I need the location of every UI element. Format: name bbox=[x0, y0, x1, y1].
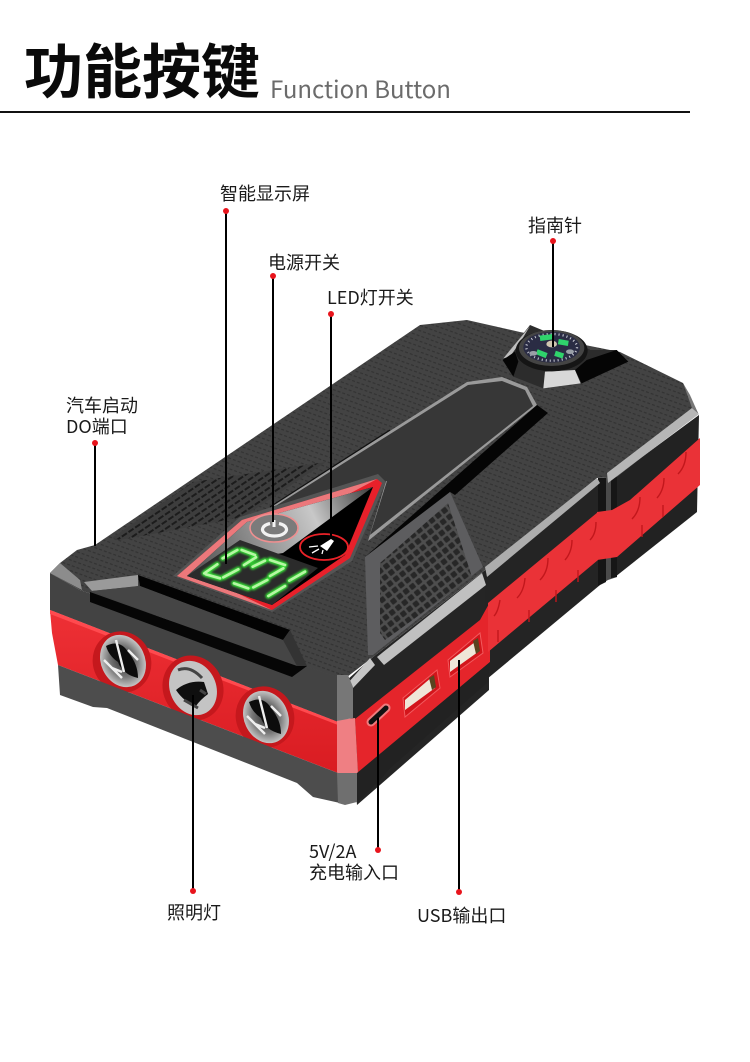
top left texture patch bbox=[112, 462, 326, 540]
callout: USB输出口 bbox=[417, 660, 506, 928]
callout: LED灯开关 bbox=[327, 284, 414, 538]
right texture patch bbox=[365, 492, 483, 655]
title: Function Button bbox=[270, 70, 451, 105]
front chamfer bbox=[50, 573, 338, 722]
callout: 5V/2A 充电输入口: 5V/2A bbox=[309, 838, 356, 864]
callout: 汽车启动 DO端口: 汽车启动 bbox=[66, 392, 138, 418]
lamp 1 bbox=[83, 622, 161, 702]
callout: 5V/2A 充电输入口: 充电输入口 bbox=[309, 859, 399, 885]
light edge highlights bbox=[348, 383, 699, 688]
display panel bbox=[173, 474, 386, 612]
red side band bbox=[355, 438, 700, 773]
callout: 指南针 bbox=[528, 212, 582, 347]
callout: 智能显示屏: 智能显示屏 bbox=[220, 180, 310, 206]
callout: 照明灯: 照明灯 bbox=[167, 899, 221, 925]
flashlight button bbox=[300, 534, 348, 560]
front red band with lamps bbox=[50, 610, 358, 773]
callout: 智能显示屏 bbox=[220, 180, 310, 564]
right side body bbox=[347, 415, 699, 805]
title bbox=[24, 25, 451, 110]
callout: USB输出口: USB输出口 bbox=[417, 902, 506, 928]
lower body bbox=[58, 662, 490, 805]
callout: 汽车启动 DO端口: DO端口 bbox=[66, 413, 128, 439]
lamp 3 bbox=[226, 677, 304, 757]
USB port 2 bbox=[448, 633, 483, 677]
power button bbox=[250, 514, 298, 542]
LED digits bbox=[204, 550, 305, 596]
callout: 指南针: 指南针 bbox=[528, 212, 582, 238]
callout: 5V/2A 充电输入口 bbox=[309, 718, 399, 885]
USB-C port bbox=[371, 708, 386, 722]
callout: LED灯开关: LED灯开关 bbox=[327, 284, 414, 310]
title: 功能按键 bbox=[24, 25, 260, 110]
callout: 电源开关: 电源开关 bbox=[268, 249, 340, 275]
compass bbox=[503, 325, 628, 388]
callout: 电源开关 bbox=[268, 249, 340, 522]
callout: 汽车启动 DO端口 bbox=[66, 392, 138, 546]
USB port 1 bbox=[403, 670, 440, 717]
lamp 2 bbox=[152, 645, 234, 731]
product: jump starter power bank bbox=[50, 320, 700, 805]
callout: 照明灯 bbox=[167, 695, 221, 925]
top face bbox=[50, 320, 698, 677]
front slot bbox=[84, 575, 307, 677]
ports bbox=[371, 633, 483, 722]
central raised Y panel bbox=[270, 377, 548, 560]
